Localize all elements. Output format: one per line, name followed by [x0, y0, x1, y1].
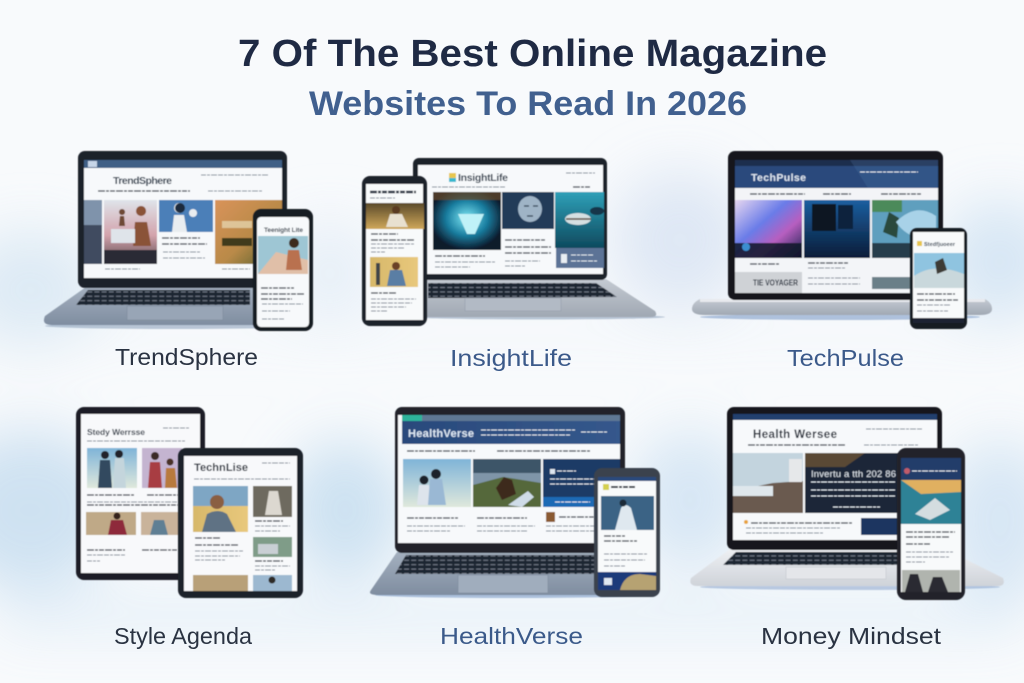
title: 7 Of The Best Online Magazine — [238, 33, 827, 75]
phone: TechPulse — [910, 228, 967, 329]
laptop: TechPulse — [692, 151, 992, 320]
phone: TrendSphere: Teenight Lite — [264, 227, 303, 234]
title — [238, 33, 827, 123]
laptop: HealthVerse — [370, 407, 658, 598]
laptop: HealthVerse: HealthVerse — [408, 428, 474, 440]
title: Websites To Read In 2026 — [309, 85, 747, 123]
phone: HealthVerse — [594, 468, 660, 597]
tablet: Style Agenda back: Stedy Werrsse — [87, 427, 145, 437]
panel: InsightLife — [362, 158, 665, 371]
label: InsightLife: InsightLife — [450, 345, 572, 371]
tablet: Style Agenda front — [178, 448, 303, 598]
phone: Money Mindset — [897, 448, 965, 600]
label: Money Mindset: Money Mindset — [761, 623, 942, 649]
panel: Style Agenda — [76, 407, 303, 649]
phone: TrendSphere — [253, 209, 313, 331]
panel: Money Mindset — [690, 407, 1004, 649]
laptop: Money Mindset: Health Wersee — [753, 429, 837, 441]
panel: HealthVerse — [370, 407, 660, 649]
laptop: InsightLife — [413, 158, 665, 320]
phone: TechPulse: Stedfjuoeer — [924, 242, 956, 248]
laptop: TrendSphere — [44, 151, 305, 329]
panel: TechPulse — [692, 151, 992, 371]
laptop: Money Mindset: Invertu a tth 202 86 — [811, 469, 896, 480]
tablet: Style Agenda front: TechnLise — [194, 462, 248, 474]
label: HealthVerse: HealthVerse — [440, 623, 583, 649]
laptop: TrendSphere: TrendSphere — [113, 175, 172, 187]
laptop: TechPulse: TechPulse — [751, 172, 806, 184]
label: TrendSphere: TrendSphere — [115, 344, 258, 370]
phone: InsightLife — [362, 176, 427, 326]
laptop: TechPulse: TIE VOYAGER — [753, 278, 798, 288]
label: TechPulse: TechPulse — [787, 345, 904, 371]
panel: TrendSphere — [44, 151, 313, 370]
label: Style Agenda: Style Agenda — [114, 623, 252, 649]
laptop: InsightLife: InsightLife — [458, 172, 508, 184]
laptop: Money Mindset — [690, 407, 1004, 590]
tablet: Style Agenda back — [76, 407, 205, 580]
